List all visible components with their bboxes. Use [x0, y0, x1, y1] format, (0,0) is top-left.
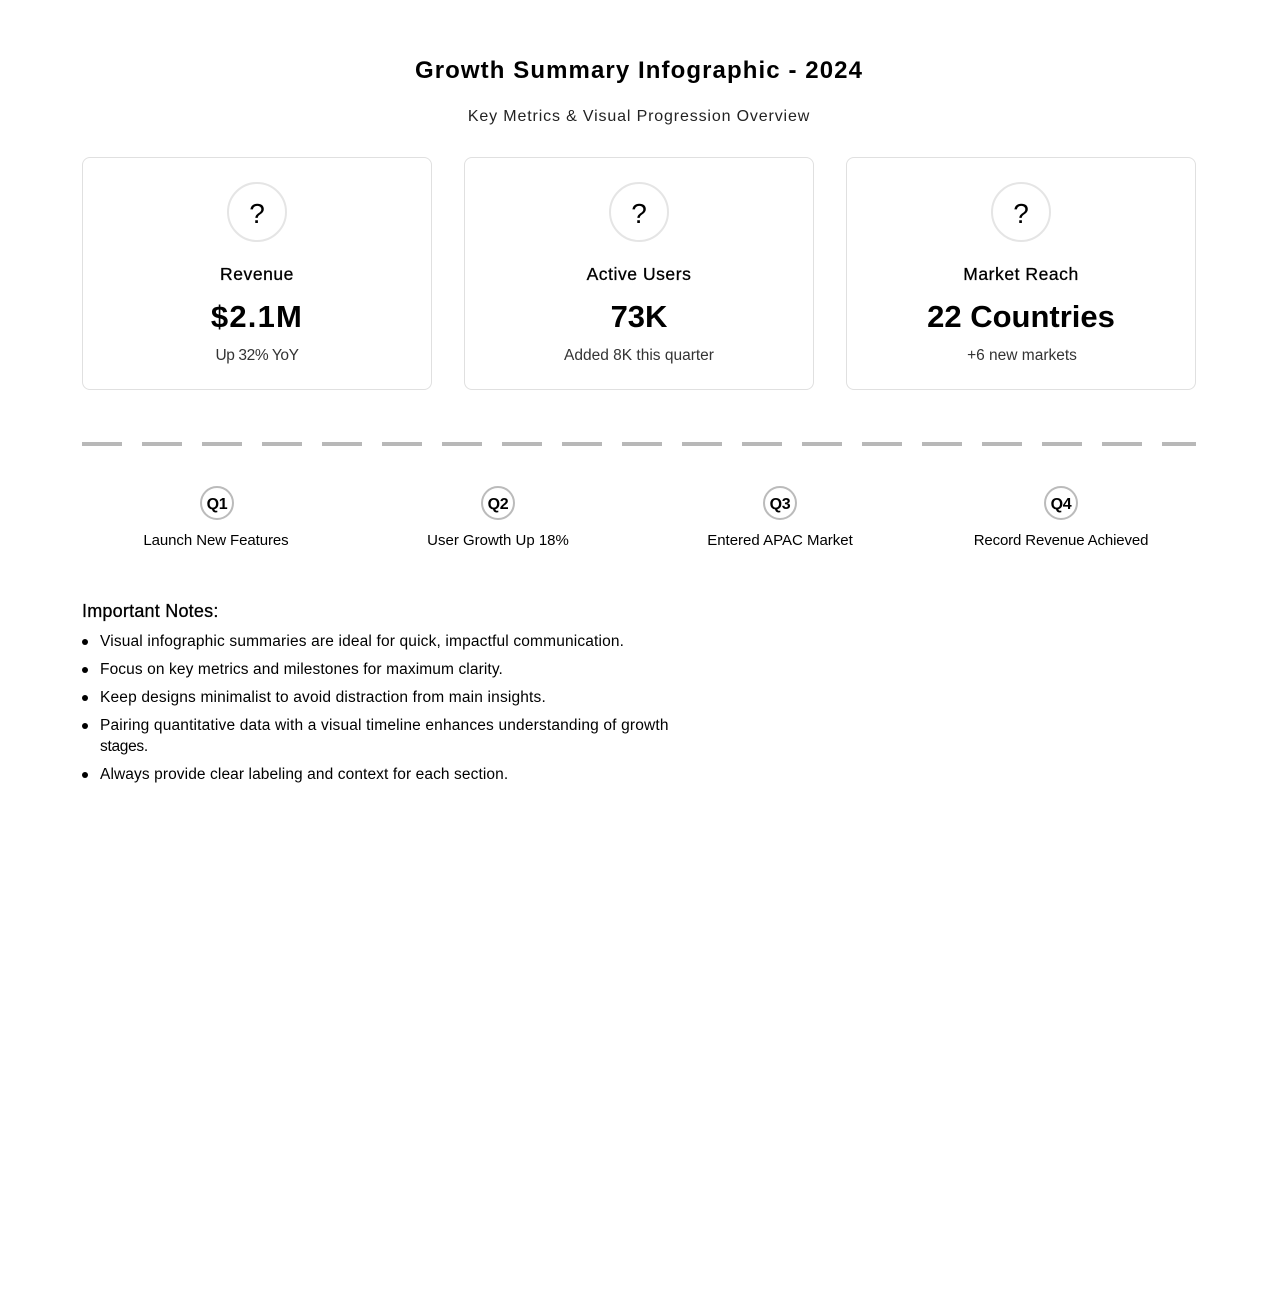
panel: revenue: [82, 157, 432, 390]
timeline dashed line: [82, 442, 1196, 446]
Q4 marker: [1044, 486, 1078, 520]
milestone Q4: [974, 486, 1148, 549]
Q4 label: Record Revenue Achieved: [974, 532, 1148, 549]
active users label: Active Users: [587, 264, 691, 284]
revenue label: Revenue: [220, 264, 294, 284]
panel: active users: [464, 157, 814, 390]
Q3 label: Entered APAC Market: [707, 532, 853, 549]
notes list: Keep designs minimalist to avoid distraction from main insights.: [100, 689, 546, 706]
milestone Q2: [427, 486, 569, 549]
icon: active users placeholder: ?: [631, 198, 647, 229]
panel: market reach: [846, 157, 1196, 390]
market reach label: Market Reach: [963, 264, 1079, 284]
Q2 marker: [481, 486, 515, 520]
icon: active users placeholder: [609, 182, 669, 242]
icon: market reach placeholder: ?: [1013, 198, 1029, 229]
Q4 marker: Q4: [1051, 496, 1071, 513]
Q1 marker: [200, 486, 234, 520]
market reach value: 22 Countries: [927, 299, 1115, 334]
revenue value: $2.1M: [211, 299, 303, 334]
notes list: Pairing quantitative data with a visual timeline enhances understanding of growth: [100, 717, 669, 734]
Q1 marker: Q1: [207, 496, 227, 513]
active users note: Added 8K this quarter: [564, 347, 714, 364]
notes list: Always provide clear labeling and context for each section.: [100, 766, 508, 783]
Q1 label: Launch New Features: [143, 532, 289, 549]
milestone Q1: [143, 486, 289, 549]
notes list: Visual infographic summaries are ideal for quick, impactful communication.: [100, 633, 624, 650]
notes list: [82, 633, 669, 783]
Q2 label: User Growth Up 18%: [427, 532, 569, 549]
Q2 marker: Q2: [488, 496, 508, 513]
icon: revenue placeholder: [227, 182, 287, 242]
Q3 marker: Q3: [770, 496, 790, 513]
revenue note: Up 32% YoY: [215, 347, 299, 364]
icon: market reach placeholder: [991, 182, 1051, 242]
active users value: 73K: [611, 299, 667, 334]
Q3 marker: [763, 486, 797, 520]
notes heading: Important Notes:: [82, 601, 219, 621]
notes section: [82, 601, 669, 783]
subtitle: Key Metrics & Visual Progression Overview: [468, 108, 810, 125]
icon: revenue placeholder: ?: [249, 198, 265, 229]
notes list: Focus on key metrics and milestones for maximum clarity.: [100, 661, 503, 678]
notes list: stages.: [100, 738, 148, 755]
milestone Q3: [707, 486, 853, 549]
title: Growth Summary Infographic - 2024: [415, 57, 863, 84]
market reach note: +6 new markets: [967, 347, 1077, 364]
